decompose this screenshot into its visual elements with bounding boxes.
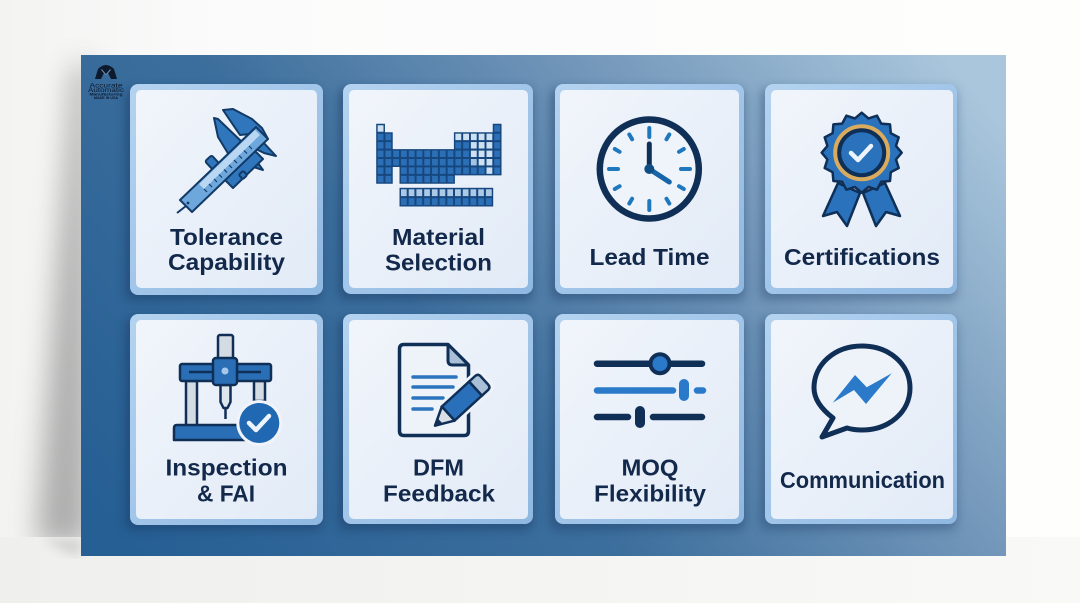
card: Material Selection <box>338 84 533 300</box>
card: Certifications <box>760 84 957 300</box>
label: Inspection <box>166 454 288 480</box>
card: Lead Time <box>550 84 745 300</box>
icon: inspection machine <box>174 335 282 446</box>
panel: blue board <box>81 55 1006 556</box>
icon: document and pencil <box>400 344 493 436</box>
logo: Accurate Automatic Manufacturing: Automatic <box>88 87 125 94</box>
icon: periodic table <box>377 124 501 206</box>
card: Communication <box>760 314 957 530</box>
logo: Accurate Automatic Manufacturing <box>88 65 125 100</box>
background wall and floor <box>0 45 536 603</box>
card: DFM Feedback <box>338 314 533 530</box>
label: MOQ <box>622 454 678 480</box>
card: MOQ Flexibility: Flexibility <box>594 480 706 506</box>
label: Certifications <box>784 244 940 270</box>
logo: Accurate Automatic Manufacturing: Accurate <box>90 82 123 90</box>
card: Material Selection: Selection <box>385 250 492 276</box>
icon: caliper <box>177 109 276 213</box>
label: DFM <box>413 454 464 480</box>
card: Tolerance Capability: Capability <box>168 249 285 275</box>
logo: Accurate Automatic Manufacturing: MADE IN USA <box>94 96 119 100</box>
logo: Accurate Automatic Manufacturing: Manufacturing <box>90 92 123 96</box>
label: Lead Time <box>590 244 710 270</box>
icon: clock <box>600 120 699 218</box>
card: MOQ Flexibility <box>550 314 745 530</box>
icon: speech bubble <box>814 346 910 437</box>
card: Tolerance Capability <box>125 84 323 300</box>
card: DFM Feedback: Feedback <box>383 480 495 506</box>
icon: sliders <box>597 354 703 428</box>
icon: award ribbon <box>822 113 902 226</box>
card: Inspection and FAI <box>125 314 323 530</box>
label: Tolerance <box>170 224 283 250</box>
label: Material <box>392 224 485 250</box>
card: Inspection and FAI: & FAI <box>197 480 255 506</box>
label: Communication <box>780 467 945 493</box>
